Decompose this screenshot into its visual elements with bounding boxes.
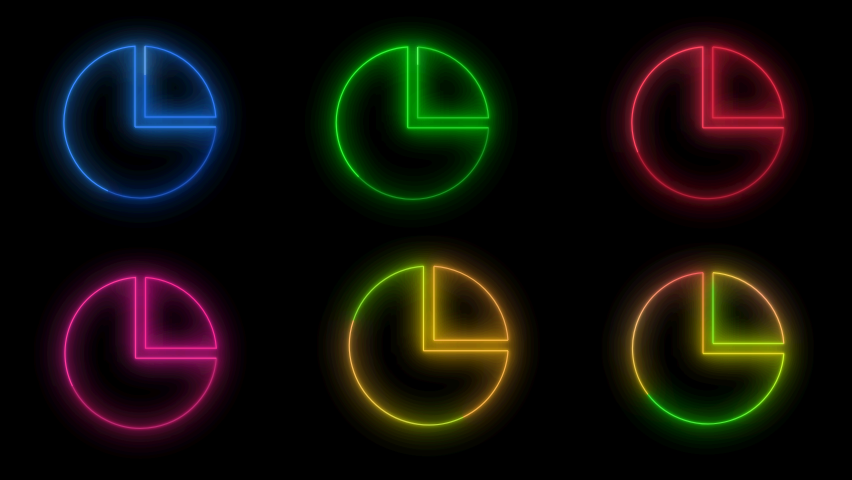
icon: blue neon pie chart <box>64 46 216 198</box>
icon: orange and green neon pie chart <box>632 273 784 424</box>
icon: green neon pie chart <box>336 47 489 199</box>
icon: pink neon pie chart <box>65 277 216 428</box>
icon: red neon pie chart <box>632 47 784 199</box>
icon: yellow neon pie chart <box>349 266 508 425</box>
